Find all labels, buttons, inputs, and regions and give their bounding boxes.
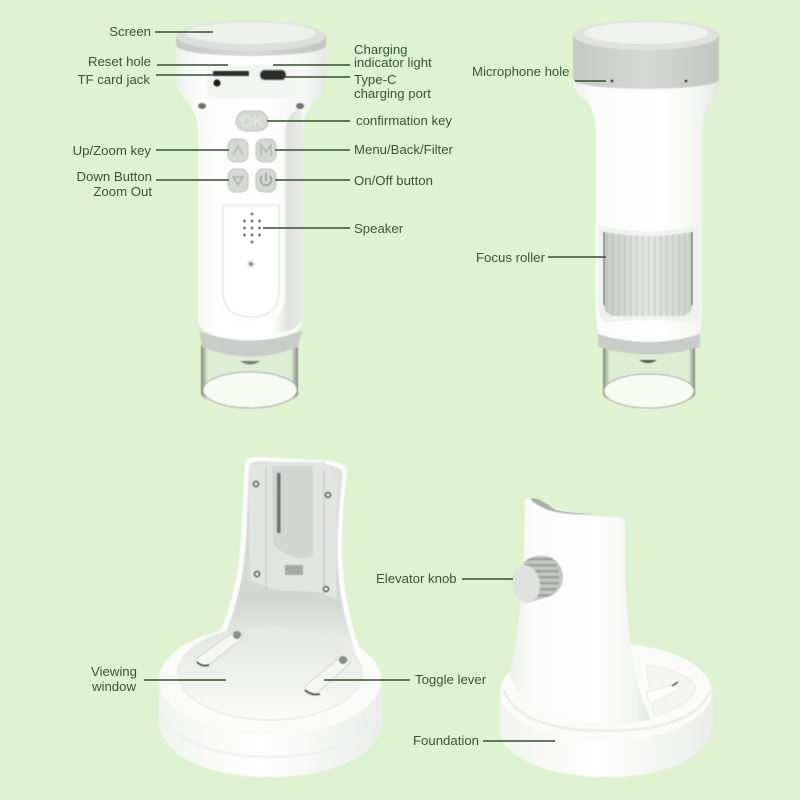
base lower ring [159,690,382,777]
label: Reset hole: Reset hole [88,54,151,69]
label: TF card jack: TF card jack [77,72,150,87]
microphone holes [611,80,687,82]
labels [73,24,606,748]
label: Focus roller: Focus roller [476,250,545,265]
stand wall [220,457,365,665]
screen [176,21,326,51]
Type-C port [260,70,286,80]
slot [277,473,280,533]
top opening [530,498,596,514]
right toggle lever [304,656,350,695]
label: Type-C charging port: Type-C [354,72,397,87]
plate rails [266,466,324,594]
OK button: OK [240,114,264,130]
label: Type-C charging port [285,72,431,101]
label: Up/Zoom key: Up/Zoom key [73,143,151,158]
port recess [207,65,296,98]
disc window [646,665,696,716]
device: microscope rear view [573,20,719,408]
label: confirmation key: confirmation key [356,113,452,128]
label: Viewing window: Viewing [91,664,137,679]
down button [228,169,248,192]
label: Down Button Zoom Out: Down Button [76,169,152,184]
foundation groove [504,690,711,731]
label: Microphone hole: Microphone hole [472,64,570,79]
base top disc [159,625,381,735]
label: Viewing window [91,664,226,694]
glass lens cup [201,345,298,408]
back plate [223,205,279,317]
label: Elevator knob: Elevator knob [376,571,457,586]
label: Charging indicator light: indicator light [354,55,432,70]
focus roller [604,232,692,316]
tower [510,498,651,723]
label: Viewing window: window [91,679,136,694]
rear gray collar [598,334,700,354]
latch [285,565,303,575]
foundation top [500,643,712,741]
label: Charging indicator light: Charging [354,42,408,57]
TF card jack slot [213,71,249,76]
base ridge [160,712,381,757]
head gray band [176,36,326,56]
elevator knob [509,556,563,605]
rear head gray band [573,35,719,89]
label: Down Button Zoom Out [76,169,229,199]
plate screws [254,482,330,592]
label: Type-C charging port: charging port [354,86,431,101]
label: Charging indicator light [273,42,432,70]
OK button [236,111,268,131]
channel [272,466,313,558]
label: Elevator knob [376,571,513,586]
power button [256,169,276,192]
rear screen [573,20,719,50]
label: Toggle lever: Toggle lever [415,672,487,687]
rear body [573,80,719,343]
device: stand rear view [159,457,382,777]
mounting plate [249,462,338,600]
peeking lever [646,682,678,704]
label: Down Button Zoom Out: Zoom Out [93,184,152,199]
label: Foundation: Foundation [413,733,479,748]
label: Microphone hole [472,64,606,81]
speaker grille [243,213,261,243]
rear glass cup [603,345,695,408]
roller window [598,225,700,322]
left toggle lever [196,631,243,666]
reset hole [213,79,221,87]
label: On/Off button: On/Off button [354,173,433,188]
handle body [176,45,326,345]
viewing window disc [178,626,362,720]
device: microscope front view [176,21,326,408]
side shading of the grip [198,108,303,339]
indicator screw [247,260,255,268]
menu button [256,139,276,162]
up button [228,139,248,162]
gray collar [199,331,302,356]
label: Screen [109,24,213,39]
label: Speaker: Speaker [354,221,404,236]
screw holes [198,103,304,109]
foundation base [500,690,713,777]
label: Screen: Screen [109,24,151,39]
label: Focus roller [476,250,606,265]
device: stand front view [500,498,713,777]
label: Menu/Back/Filter: Menu/Back/Filter [354,142,454,157]
